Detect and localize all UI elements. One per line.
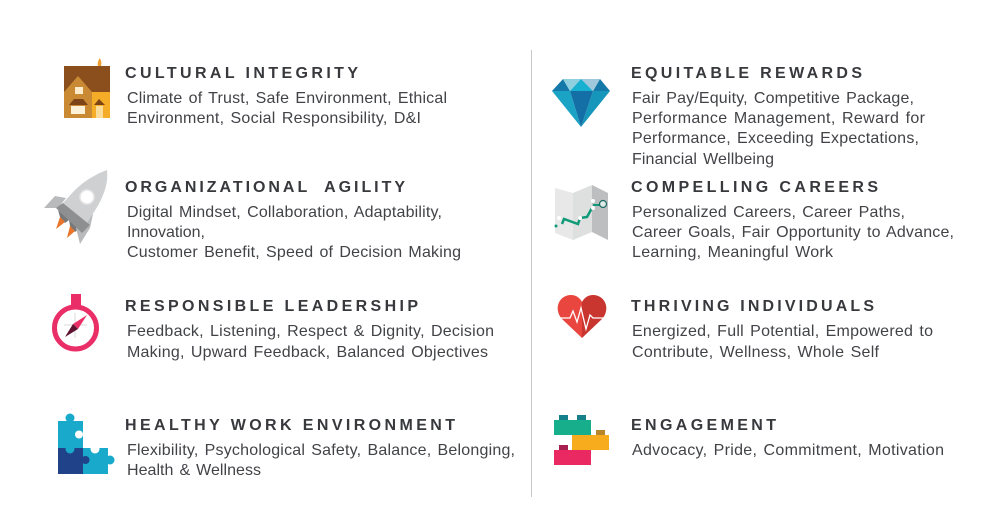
text block: thriving individuals <box>632 323 933 361</box>
panel: thriving individuals <box>558 295 933 361</box>
text block: healthy work environment: Health & Wellness <box>127 462 261 479</box>
panel: responsible leadership <box>54 294 494 361</box>
icon: rocket <box>44 170 107 244</box>
text block: equitable rewards: Fair Pay/Equity, Competitive Package, <box>632 90 914 107</box>
panel: engagement <box>554 415 944 465</box>
text block: equitable rewards <box>632 90 926 168</box>
icon: diamond <box>552 79 610 127</box>
panel: cultural integrity <box>64 58 447 127</box>
text block: compelling careers <box>632 204 954 261</box>
text block: thriving individuals: Energized, Full Potential, Empowered to <box>632 323 933 340</box>
text block: compelling careers: Personalized Careers, Career Paths, <box>632 204 905 221</box>
icon: heart <box>558 295 606 338</box>
icon: house <box>64 58 110 118</box>
heading: engagement: ENGAGEMENT <box>631 417 776 434</box>
panel: equitable rewards <box>552 65 926 168</box>
icon: compass <box>54 294 96 349</box>
icon: building bricks <box>554 415 609 465</box>
icon: map <box>554 185 608 240</box>
panel: organizational agility <box>44 170 461 261</box>
text block: responsible leadership: Feedback, Listening, Respect & Dignity, Decision <box>127 323 494 340</box>
text block: compelling careers: Career Goals, Fair Opportunity to Advance, <box>632 224 954 241</box>
text block: cultural integrity <box>127 90 447 127</box>
text block: equitable rewards: Performance, Exceeding Expectations, <box>632 130 919 147</box>
panel: healthy work environment <box>58 414 515 479</box>
icon: puzzle <box>58 414 114 474</box>
text block: equitable rewards: Performance Management, Reward for <box>632 110 926 127</box>
heading: thriving individuals: THRIVING INDIVIDUALS <box>631 298 874 315</box>
heading: equitable rewards: EQUITABLE REWARDS <box>631 65 862 82</box>
text block: responsible leadership <box>127 323 494 361</box>
text block: responsible leadership: Making, Upward Feedback, Balanced Objectives <box>127 344 488 361</box>
text block: organizational agility: Customer Benefit, Speed of Decision Making <box>127 244 461 261</box>
heading: responsible leadership: RESPONSIBLE LEADERSHIP <box>125 298 418 315</box>
text block: organizational agility: Digital Mindset, Collaboration, Adaptability, <box>127 204 442 221</box>
text block: cultural integrity: Climate of Trust, Safe Environment, Ethical <box>127 90 447 107</box>
heading: compelling careers: COMPELLING CAREERS <box>631 179 878 196</box>
text block: equitable rewards: Financial Wellbeing <box>632 151 774 168</box>
text block: cultural integrity: Environment, Social Responsibility, D&I <box>127 110 421 127</box>
text block: compelling careers: Learning, Meaningful Work <box>632 244 834 261</box>
text block: healthy work environment <box>127 442 515 479</box>
panel: compelling careers <box>554 179 954 261</box>
text block: organizational agility <box>127 204 461 261</box>
text block: healthy work environment: Flexibility, Psychological Safety, Balance, Belonging, <box>127 442 515 459</box>
text block: organizational agility: Innovation, <box>127 224 205 241</box>
heading: healthy work environment: HEALTHY WORK ENVIRONMENT <box>125 417 455 434</box>
heading: organizational agility: ORGANIZATIONAL AGILITY <box>125 179 405 196</box>
text block: thriving individuals: Contribute, Wellness, Whole Self <box>632 344 880 361</box>
heading: cultural integrity: CULTURAL INTEGRITY <box>125 65 358 82</box>
text block: engagement: Advocacy, Pride, Commitment, Motivation <box>632 442 944 459</box>
